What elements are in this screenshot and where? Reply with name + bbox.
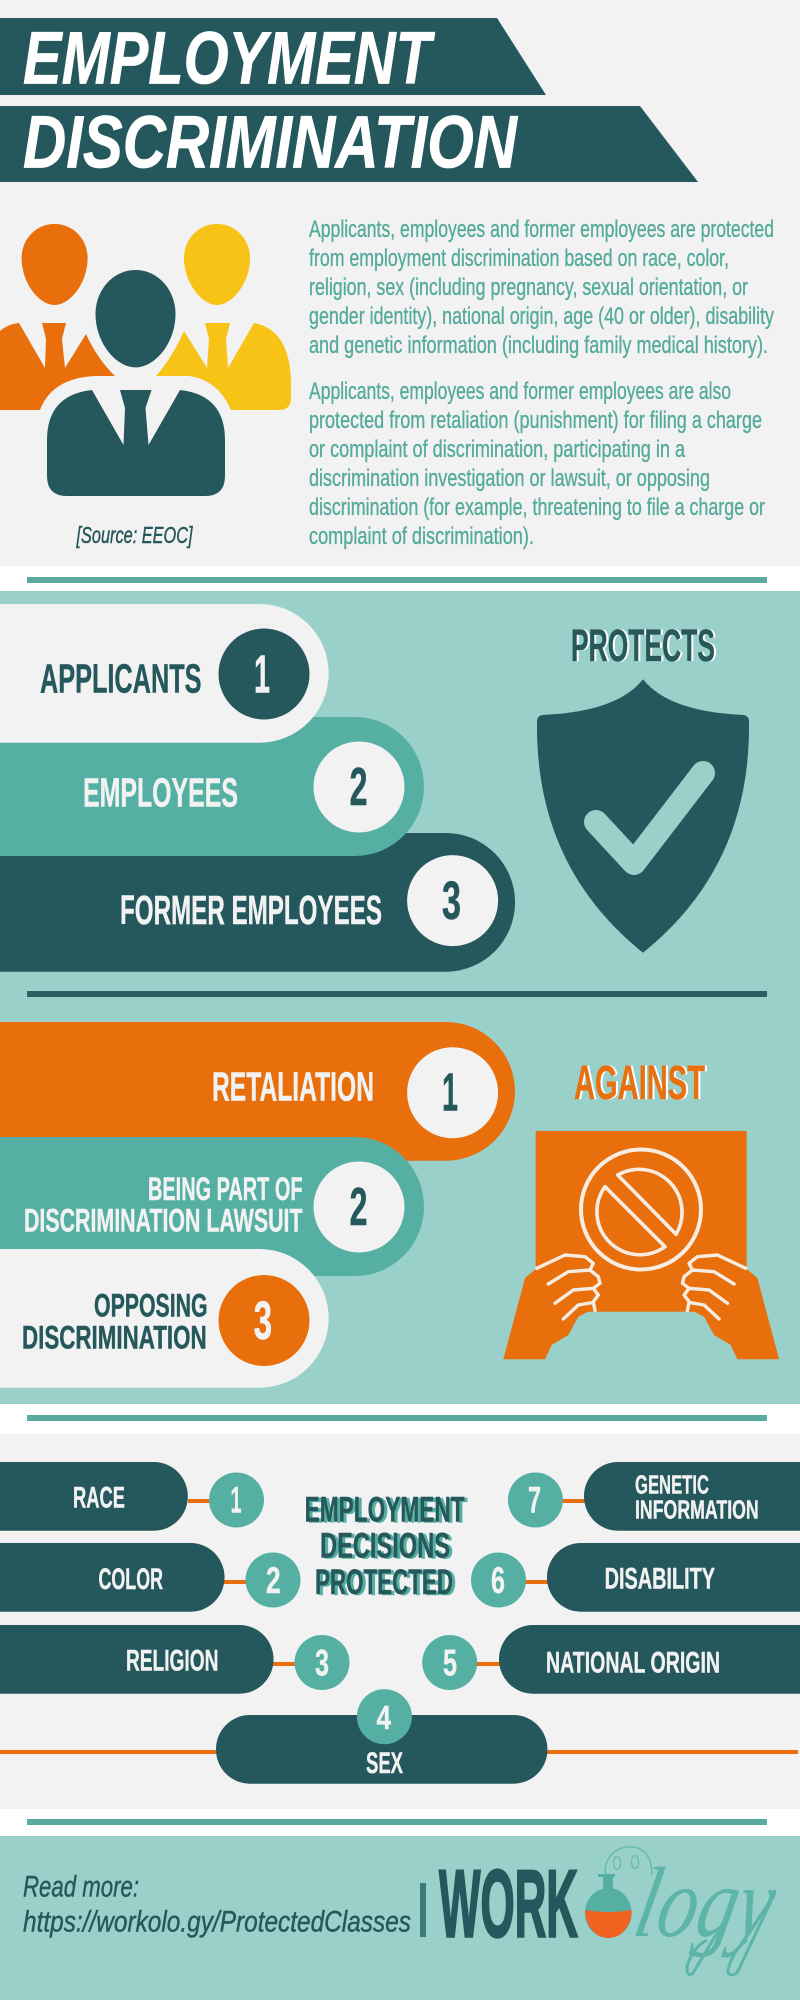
title: [0, 16, 698, 184]
bar: employees: 2: [350, 757, 368, 817]
item 6: disability: [471, 1543, 800, 1612]
item 1: race: RACE: [73, 1482, 125, 1515]
item 6: disability: DISABILITY: [605, 1562, 715, 1595]
item 4: sex: [0, 1689, 798, 1784]
bar: retaliation: [0, 1022, 515, 1161]
bar: employees: EMPLOYEES: [83, 770, 238, 816]
logo: workology: WORK: [439, 1850, 578, 1958]
item 2: color: [0, 1543, 300, 1612]
heading: employment decisions protected: EMPLOYMENT: [305, 1491, 465, 1530]
item 4: sex: SEX: [366, 1747, 403, 1780]
bar: former employees: 3: [442, 871, 461, 931]
bar: opposing discrimination: 3: [254, 1291, 272, 1351]
item 4: sex: 4: [376, 1699, 392, 1736]
panel: protects list: [0, 604, 515, 972]
icon: three business people: [0, 224, 291, 496]
item 3: religion: [0, 1625, 350, 1694]
bar: opposing discrimination: [0, 1249, 329, 1388]
left hand: [503, 1254, 600, 1359]
bar: being part of discrimination lawsuit: 2: [350, 1177, 368, 1237]
bar: being part of discrimination lawsuit: [0, 1137, 424, 1276]
bar: retaliation: RETALIATION: [212, 1064, 374, 1110]
item 7: genetic information: [508, 1462, 800, 1531]
footer: read more: [23, 1871, 411, 1939]
title banner: discrimination: DISCRIMINATION: [23, 100, 518, 184]
item 1: race: 1: [230, 1480, 242, 1521]
panel: employment decisions protected: [0, 1462, 800, 1784]
text block: retaliation: complaint of discrimination).: [309, 523, 534, 550]
source note: [Source: EEOC]: [76, 522, 193, 548]
icon: shield with check: [537, 679, 749, 953]
item 5: national origin: [422, 1625, 800, 1694]
text block: retaliation: [309, 378, 765, 550]
item 7: genetic information: 7: [528, 1480, 541, 1521]
panel: against list: [0, 1022, 515, 1388]
bar: former employees: FORMER EMPLOYEES: [120, 887, 382, 933]
item 2: color: 2: [266, 1560, 281, 1601]
footer: read more: https://workolo.gy/ProtectedClasses: [23, 1906, 411, 1939]
bar: opposing discrimination: OPPOSING: [94, 1288, 208, 1324]
icon: hands holding prohibition sign: [503, 1131, 779, 1359]
title banner: employment: EMPLOYMENT: [23, 16, 436, 100]
right hand: [682, 1254, 779, 1359]
heading: employment decisions protected: PROTECTED: [315, 1563, 453, 1602]
footer: read more: Read more:: [23, 1871, 139, 1904]
item 6: disability: 6: [491, 1560, 505, 1601]
bar: former employees: [0, 833, 515, 972]
item 2: color: COLOR: [98, 1563, 163, 1596]
item 7: genetic information: GENETIC: [635, 1469, 709, 1499]
bar: being part of discrimination lawsuit: BEING PART OF: [148, 1171, 302, 1207]
bar: opposing discrimination: DISCRIMINATION: [22, 1319, 207, 1355]
bar: retaliation: 1: [442, 1063, 458, 1123]
heading: employment decisions protected: [305, 1491, 465, 1602]
heading: against: AGAINST: [574, 1057, 705, 1110]
item 3: religion: RELIGION: [126, 1645, 218, 1678]
bar: applicants: [0, 604, 329, 743]
text block: who is protected: [309, 216, 774, 359]
bar: being part of discrimination lawsuit: DISCRIMINATION LAWSUIT: [24, 1203, 303, 1239]
bar: applicants: 1: [254, 645, 270, 705]
bar: applicants: APPLICANTS: [40, 656, 202, 702]
item 5: national origin: 5: [443, 1643, 457, 1684]
heading: employment decisions protected: DECISIONS: [320, 1526, 450, 1565]
item 3: religion: 3: [315, 1643, 329, 1684]
item 1: race: [0, 1462, 264, 1531]
text block: retaliation: or complaint of discrimination, participating in a: [309, 436, 685, 463]
flask: [585, 1847, 652, 1938]
bar: employees: [0, 717, 424, 856]
